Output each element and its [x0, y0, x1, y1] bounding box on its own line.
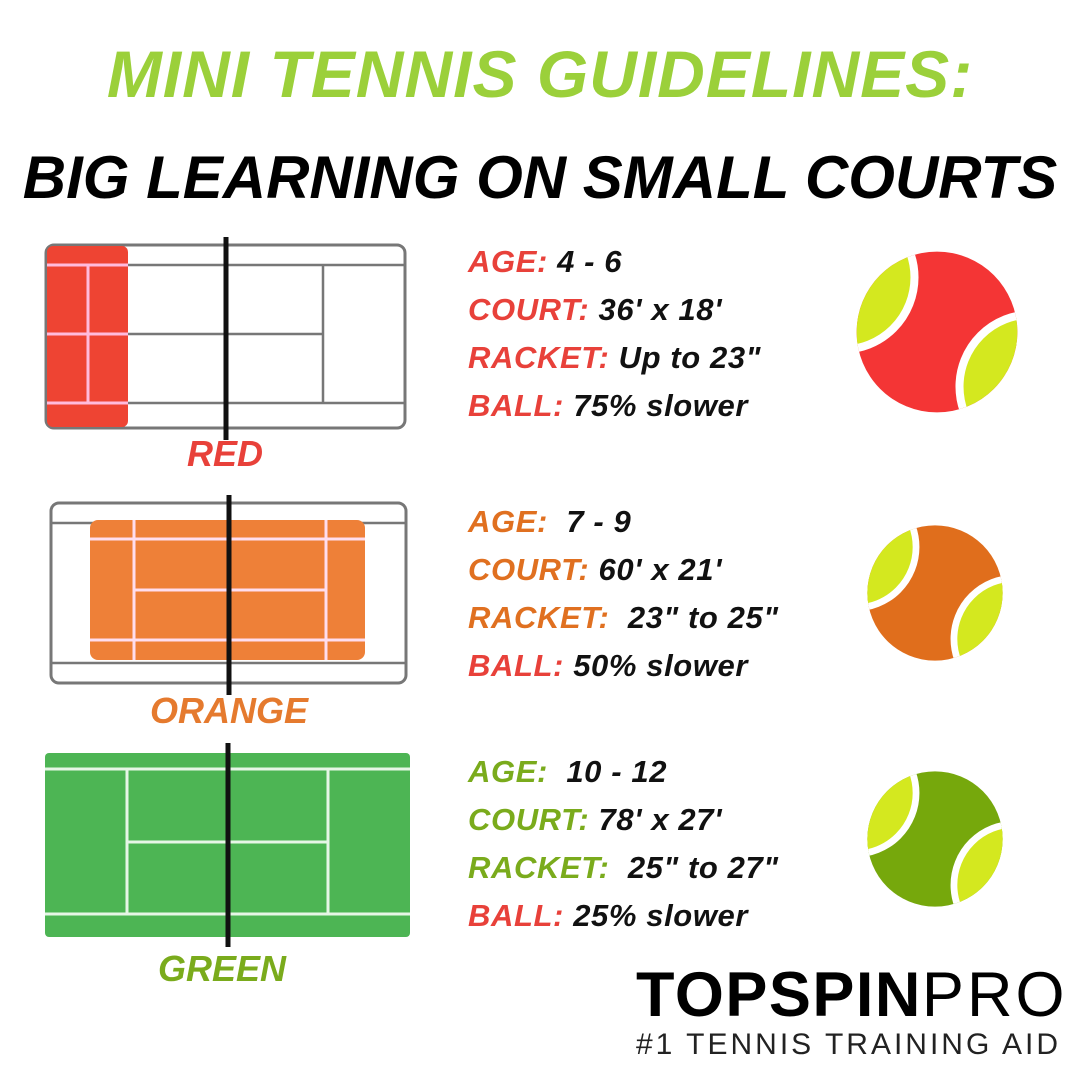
icon: green ball [867, 771, 1003, 907]
subtitle: BIG LEARNING ON SMALL COURTS [23, 144, 1057, 211]
info: green: RACKET: 25" to 27" [468, 850, 779, 885]
info: green: AGE: 10 - 12 [468, 754, 667, 789]
info: red [467, 244, 761, 423]
title: MINI TENNIS GUIDELINES: [107, 37, 973, 111]
info: green [467, 754, 779, 933]
label: orange: ORANGE [150, 690, 308, 731]
label: red: RED [187, 433, 263, 474]
court: orange [50, 495, 408, 695]
info: orange [467, 504, 779, 683]
logo: #1 TENNIS TRAINING AID [636, 1028, 1061, 1061]
icon: red ball [856, 252, 1018, 412]
icon: orange ball [867, 525, 1003, 661]
info: orange: AGE: 7 - 9 [468, 504, 631, 539]
court: red [44, 237, 406, 440]
logo [636, 960, 1067, 1061]
info: green: BALL: 25% slower [468, 898, 748, 933]
info: orange: BALL: 50% slower [468, 648, 748, 683]
label: green: GREEN [158, 948, 286, 989]
info: red: AGE: 4 - 6 [468, 244, 622, 279]
info: red: RACKET: Up to 23" [468, 340, 761, 375]
court: green [45, 743, 410, 947]
info: green: COURT: 78' x 27' [468, 802, 722, 837]
info: red: COURT: 36' x 18' [468, 292, 722, 327]
info: red: BALL: 75% slower [468, 388, 748, 423]
info: orange: RACKET: 23" to 25" [468, 600, 779, 635]
logo: TOPSPINPRO [636, 960, 1067, 1030]
info: orange: COURT: 60' x 21' [468, 552, 722, 587]
